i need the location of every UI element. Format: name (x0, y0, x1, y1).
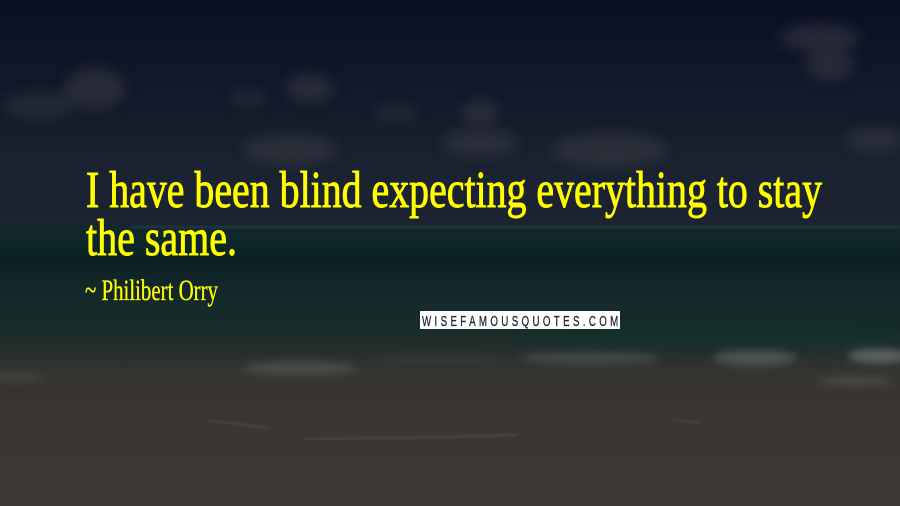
attribution: ~ Philibert Orry (85, 274, 218, 307)
foam line (207, 420, 700, 439)
quote text (86, 162, 822, 267)
watermark logo: WISEFAMOUSQUOTES.COM (422, 313, 618, 330)
water highlight (130, 226, 900, 228)
clouds (4, 24, 900, 166)
green water tint (520, 321, 900, 349)
quote line 2: the same. (86, 210, 237, 267)
waves (0, 349, 900, 385)
